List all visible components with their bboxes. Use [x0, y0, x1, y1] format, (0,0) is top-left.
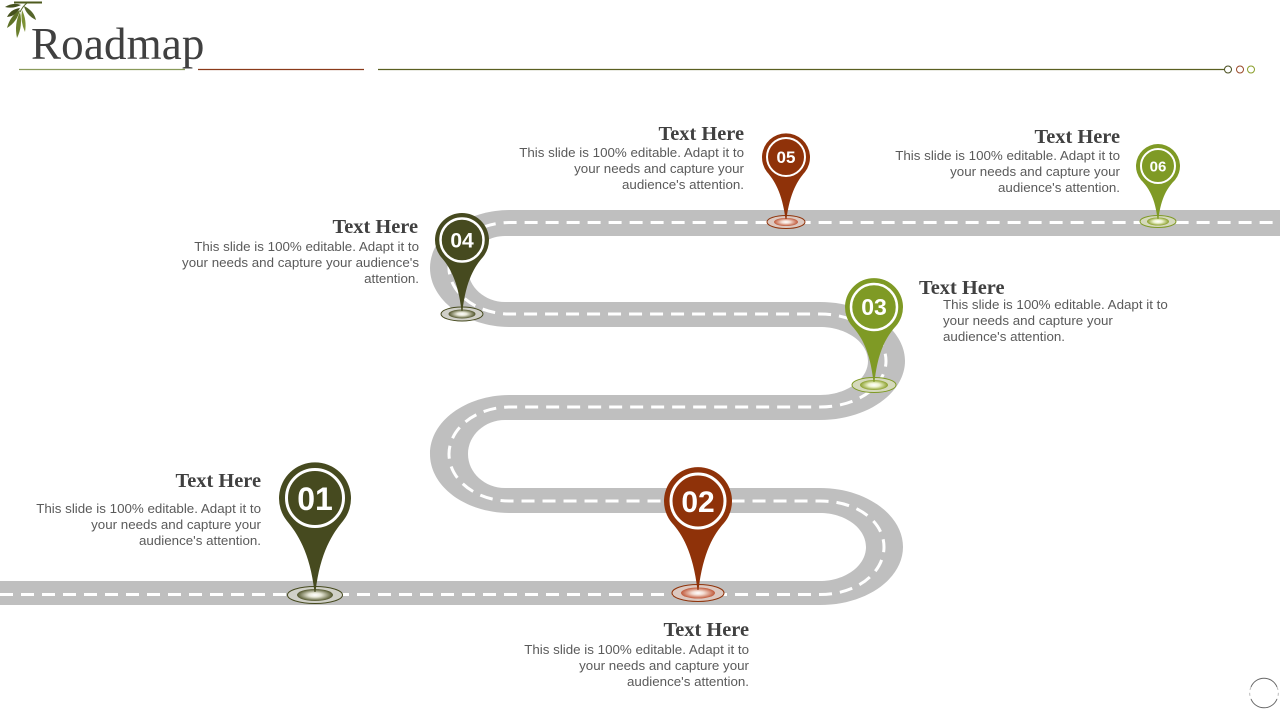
title: Roadmap — [31, 19, 205, 69]
milestone 01 text: your needs and capture your — [91, 517, 262, 532]
milestone 06 text: Text Here — [1034, 126, 1120, 148]
milestone 05 text: audience's attention. — [622, 177, 744, 192]
milestone 05 text: your needs and capture your — [574, 161, 745, 176]
milestone 03 pin: 03 — [861, 294, 887, 320]
milestone 03 pin — [845, 278, 903, 392]
milestone 02 text: Text Here — [663, 619, 749, 641]
milestone 05 text: Text Here — [658, 123, 744, 145]
milestone 01 pin — [279, 462, 351, 604]
milestone 04 text: This slide is 100% editable. Adapt it to — [194, 239, 419, 254]
milestone 04 pin — [435, 213, 489, 321]
milestone 01 pin: 01 — [297, 481, 333, 517]
milestone 05 text: This slide is 100% editable. Adapt it to — [519, 145, 744, 160]
milestone 01 text: audience's attention. — [139, 533, 261, 548]
milestone 04 text: Text Here — [332, 216, 418, 238]
road — [0, 210, 1280, 605]
milestone 03 text: audience's attention. — [943, 329, 1065, 344]
milestone 05 pin — [762, 133, 810, 228]
milestone 01 text: This slide is 100% editable. Adapt it to — [36, 501, 261, 516]
milestone 03 text — [919, 277, 1168, 344]
milestone 06 pin: 06 — [1150, 158, 1166, 176]
milestone 03 text: Text Here — [919, 277, 1005, 299]
icon: leaf sprig — [5, 2, 42, 38]
milestone 01 text — [36, 470, 262, 548]
milestone 06 text — [895, 126, 1121, 195]
milestone 06 text: your needs and capture your — [950, 164, 1121, 179]
milestone 02 text: This slide is 100% editable. Adapt it to — [524, 642, 749, 657]
milestone 02 text: audience's attention. — [627, 674, 749, 689]
milestone 04 text: attention. — [364, 271, 419, 286]
milestone 04 pin: 04 — [450, 230, 474, 252]
milestone 02 text: your needs and capture your — [579, 658, 750, 673]
milestone 04 text: your needs and capture your audience's — [182, 255, 419, 270]
header rule — [19, 66, 1254, 73]
milestone 02 pin: 02 — [681, 486, 715, 519]
milestone 04 text — [182, 216, 419, 286]
milestone 06 text: audience's attention. — [998, 180, 1120, 195]
milestone 02 text — [524, 619, 750, 689]
milestone 03 text: This slide is 100% editable. Adapt it to — [943, 297, 1168, 312]
milestone 06 pin — [1136, 144, 1180, 228]
milestone 01 text: Text Here — [175, 470, 261, 492]
milestone 06 text: This slide is 100% editable. Adapt it to — [895, 148, 1120, 163]
milestone 05 pin: 05 — [777, 148, 795, 167]
milestone 02 pin — [664, 467, 732, 602]
milestone 03 text: your needs and capture your — [943, 313, 1113, 328]
milestone 05 text — [519, 123, 745, 192]
corner circle — [1250, 678, 1278, 708]
